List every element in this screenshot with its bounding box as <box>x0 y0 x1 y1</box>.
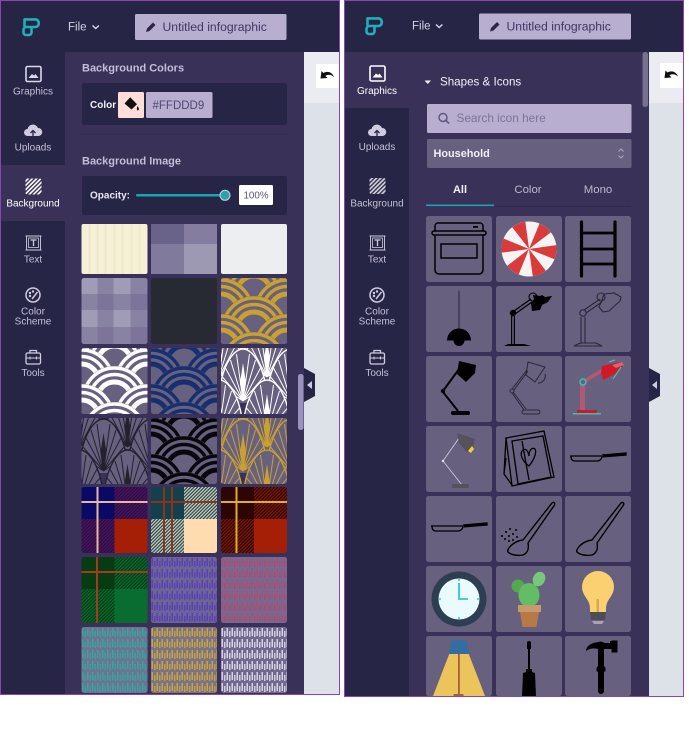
canvas area <box>649 52 683 696</box>
sidebar: tools <box>365 350 389 379</box>
thumbnail: cream stripes <box>82 224 148 274</box>
color picker row <box>82 83 287 125</box>
opacity slider <box>82 176 287 215</box>
sidebar: graphics: Graphics <box>13 86 53 98</box>
tabs <box>426 184 631 207</box>
icon tile: pendant lamp <box>426 286 492 352</box>
category dropdown <box>427 139 632 168</box>
sidebar: tools <box>21 350 45 379</box>
scrollbar <box>642 52 648 107</box>
thumbnail: white fans <box>221 348 287 414</box>
category dropdown: Household <box>434 148 490 160</box>
sidebar: background: Background <box>350 198 404 210</box>
icon tile: floor lamp <box>426 636 492 696</box>
sidebar: color scheme: Color <box>21 306 46 318</box>
icon tile: black angled lamp <box>426 356 492 422</box>
collapse handle <box>304 368 315 402</box>
icon tile: outline angled lamp <box>496 356 562 422</box>
thumbnail: black waves <box>151 418 217 484</box>
thumbnail: gold fans <box>221 418 287 484</box>
sidebar: uploads <box>359 125 395 153</box>
heading: background colors: Background Colors <box>82 62 184 74</box>
thumbnail: gold waves <box>221 278 287 344</box>
icon tile: outline desk lamp <box>565 286 631 352</box>
search box <box>427 104 632 133</box>
sidebar: uploads: Uploads <box>15 142 51 154</box>
title field: Untitled infographic <box>162 20 267 34</box>
sidebar: color scheme <box>15 288 52 328</box>
thumbnail: red plaid <box>221 487 287 553</box>
tabs: Color <box>514 184 542 196</box>
tabs: All <box>453 184 467 196</box>
icon tile: light bulb <box>565 566 631 632</box>
icon tile: cactus <box>496 566 562 632</box>
background image thumbnails <box>82 224 287 693</box>
sidebar: uploads: Uploads <box>359 142 395 153</box>
settings panel background <box>409 52 649 696</box>
icon tile: ladder <box>565 216 631 282</box>
sidebar: graphics <box>13 66 53 98</box>
active sidebar tab <box>345 52 409 108</box>
thumbnail: pink weave <box>221 557 287 623</box>
panel: shapes and icons editor screenshot <box>344 0 684 697</box>
thumbnail: silver weave <box>221 627 287 693</box>
icon tile: screwdriver <box>496 636 562 696</box>
sidebar: tools: Tools <box>365 368 389 379</box>
thumbnail: dark fans <box>82 418 148 484</box>
icon tile: grey desk lamp <box>426 426 492 492</box>
icon grid <box>426 216 631 696</box>
icon tile: wall clock <box>426 566 492 632</box>
logo <box>366 18 382 34</box>
active sidebar tab <box>1 165 65 221</box>
file menu: File <box>412 20 431 32</box>
icon tile: spoon with spice <box>496 496 562 562</box>
heading: background image: Background Image <box>82 156 181 168</box>
thumbnail: soft squares <box>151 224 217 274</box>
title field <box>135 14 286 40</box>
icon tile: spoon <box>565 496 631 562</box>
thumbnail: navy waves <box>151 348 217 414</box>
icon tile: red and white parasol <box>496 216 562 282</box>
file menu <box>68 22 99 34</box>
thumbnail: navy plaid <box>82 487 148 553</box>
sidebar: graphics <box>357 66 397 97</box>
search box: Search icon here <box>456 111 546 125</box>
color picker row: Color <box>90 100 116 111</box>
thumbnail: green plaid <box>82 557 148 623</box>
thumbnail: gingham <box>82 278 148 344</box>
sidebar: tools: Tools <box>21 368 45 379</box>
sidebar: color scheme <box>359 288 396 328</box>
file menu <box>412 20 442 32</box>
sidebar: text: Text <box>368 254 386 266</box>
sidebar: graphics: Graphics <box>357 86 397 97</box>
settings panel background <box>65 52 304 694</box>
icon tile: frying pan <box>426 496 492 562</box>
icon tile: picture frame <box>496 426 562 492</box>
heading: shapes and icons: Shapes & Icons <box>440 76 521 88</box>
color picker row: #FFDDD9 <box>152 100 204 112</box>
opacity slider: Opacity: <box>90 190 130 202</box>
file menu: File <box>68 22 87 34</box>
icon tile: oven <box>426 216 492 282</box>
title field <box>479 14 631 40</box>
icon tile: coloured desk lamp <box>565 356 631 422</box>
canvas area <box>304 52 339 694</box>
thumbnail: white waves <box>82 348 148 414</box>
sidebar: uploads <box>15 125 51 154</box>
title field: Untitled infographic <box>506 20 611 34</box>
icon tile: hammer <box>565 636 631 696</box>
sidebar: background <box>6 178 60 210</box>
icon tile: frying pan <box>565 426 631 492</box>
collapse handle <box>649 368 660 402</box>
sidebar: background: Background <box>6 198 60 210</box>
thumbnail: teal plaid <box>151 487 217 553</box>
sidebar: text: Text <box>24 254 42 266</box>
sidebar: color scheme: Scheme <box>359 316 396 328</box>
logo <box>24 19 39 35</box>
sidebar: background <box>350 178 404 210</box>
icon tile: black desk lamp <box>496 286 562 352</box>
thumbnail: purple weave <box>151 557 217 623</box>
sidebar: color scheme: Color <box>365 306 390 318</box>
sidebar: text <box>368 236 386 266</box>
sidebar: text <box>24 236 42 266</box>
tabs: Mono <box>584 184 612 196</box>
sidebar: color scheme: Scheme <box>15 316 52 328</box>
scrollbar <box>298 374 304 430</box>
thumbnail: teal weave <box>82 627 148 693</box>
thumbnail: charcoal <box>151 278 217 344</box>
opacity slider: 100% <box>243 190 269 202</box>
thumbnail: white paper <box>221 224 287 274</box>
panel: background editor screenshot <box>0 0 340 695</box>
thumbnail: gold weave <box>151 627 217 693</box>
